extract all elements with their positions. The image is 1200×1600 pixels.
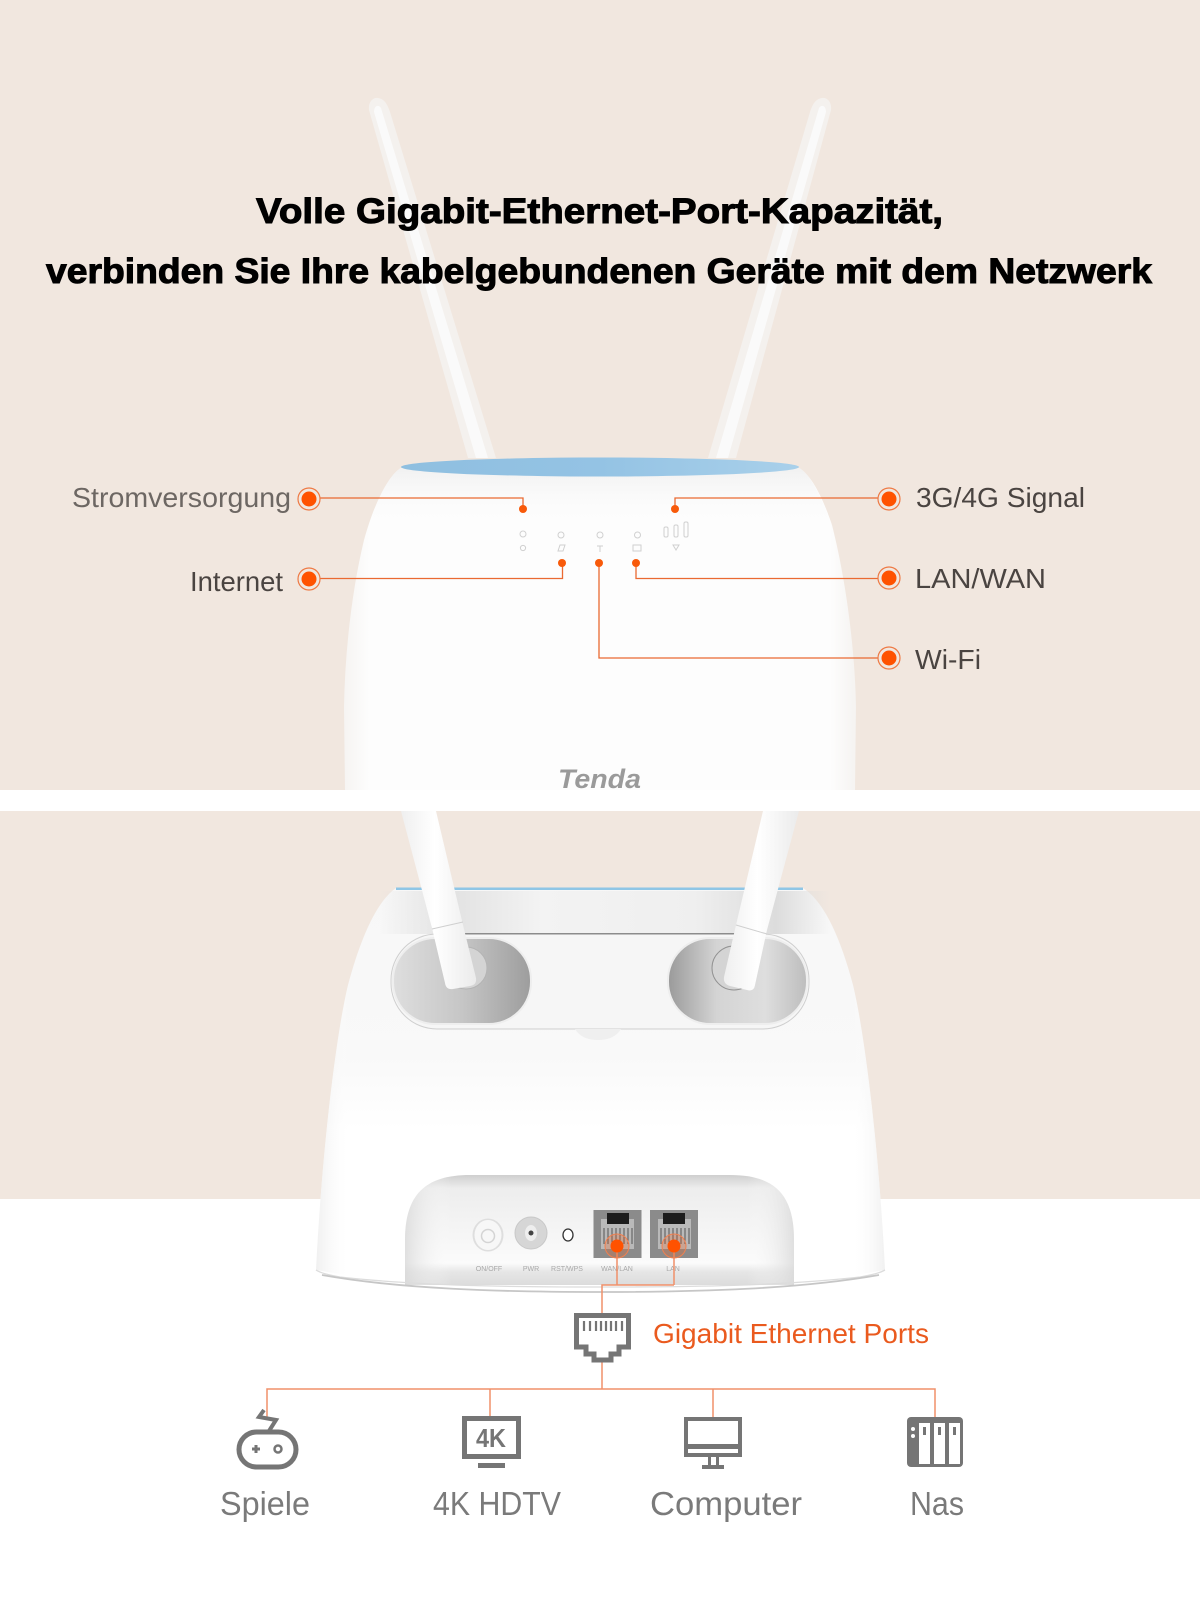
callout: Internet: Internet <box>190 566 283 597</box>
title: Volle Gigabit-Ethernet-Port-Kapazität, <box>256 192 943 231</box>
icon: game controller <box>239 1410 296 1467</box>
rear router body <box>316 811 885 1292</box>
label: Nas: Nas <box>910 1485 964 1522</box>
front router body <box>344 458 856 794</box>
antenna socket right <box>668 938 807 1024</box>
port labels: ON/OFF <box>476 1266 502 1273</box>
Tenda logo: Tenda <box>558 764 641 794</box>
callout: Wi-Fi: Wi-Fi <box>915 644 981 675</box>
heading: Gigabit Ethernet Ports: Gigabit Ethernet Ports <box>653 1318 929 1349</box>
lower recess panel <box>391 934 809 1029</box>
port labels <box>476 1266 680 1273</box>
port labels: RST/WPS <box>551 1266 583 1273</box>
rear antenna right <box>724 811 799 990</box>
callout: Wi-Fi <box>878 644 981 675</box>
icon: ethernet plug <box>576 1316 628 1360</box>
title: verbinden Sie Ihre kabelgebundenen Geräte mit dem Netzwerk <box>46 252 1153 291</box>
label: Spiele: Spiele <box>220 1485 310 1522</box>
front router antenna right <box>708 98 831 458</box>
icon: computer <box>684 1417 742 1469</box>
LED indicators <box>520 522 688 552</box>
antenna socket left <box>393 938 531 1024</box>
power jack <box>515 1217 547 1249</box>
bottom panel background <box>0 811 1200 1199</box>
callout: 3G/4G Signal: 3G/4G Signal <box>916 482 1085 513</box>
small tab <box>575 1029 621 1040</box>
port labels: WAN/LAN <box>601 1266 633 1273</box>
icon: 4K TV <box>464 1418 518 1468</box>
rear antenna left <box>401 811 476 989</box>
port markers <box>605 1234 686 1258</box>
rear port recess <box>405 1175 794 1285</box>
label: Computer: Computer <box>650 1485 802 1522</box>
on/off button <box>472 1218 504 1252</box>
callout lines front <box>320 498 878 658</box>
ports connector lines <box>267 1246 935 1417</box>
base lip <box>316 1270 885 1292</box>
LAN port 2 <box>650 1210 698 1258</box>
reset button <box>563 1229 573 1241</box>
callout: Stromversorgung: Stromversorgung <box>72 482 291 513</box>
icon: NAS <box>907 1417 963 1467</box>
LAN port 1 <box>594 1210 642 1258</box>
port labels: PWR <box>523 1266 539 1273</box>
label: 4K HDTV: 4K HDTV <box>433 1485 561 1522</box>
LED pointer dots <box>519 505 679 567</box>
callout: LAN/WAN: LAN/WAN <box>915 563 1046 594</box>
blue top panel <box>401 458 799 476</box>
port labels: LAN <box>666 1266 680 1273</box>
top panel background <box>0 0 1200 790</box>
top recess strip <box>380 891 830 934</box>
blue top edge <box>396 888 803 890</box>
front router antenna left <box>369 98 496 458</box>
icon: 4K TV: 4K <box>476 1423 506 1453</box>
title <box>46 192 1153 291</box>
